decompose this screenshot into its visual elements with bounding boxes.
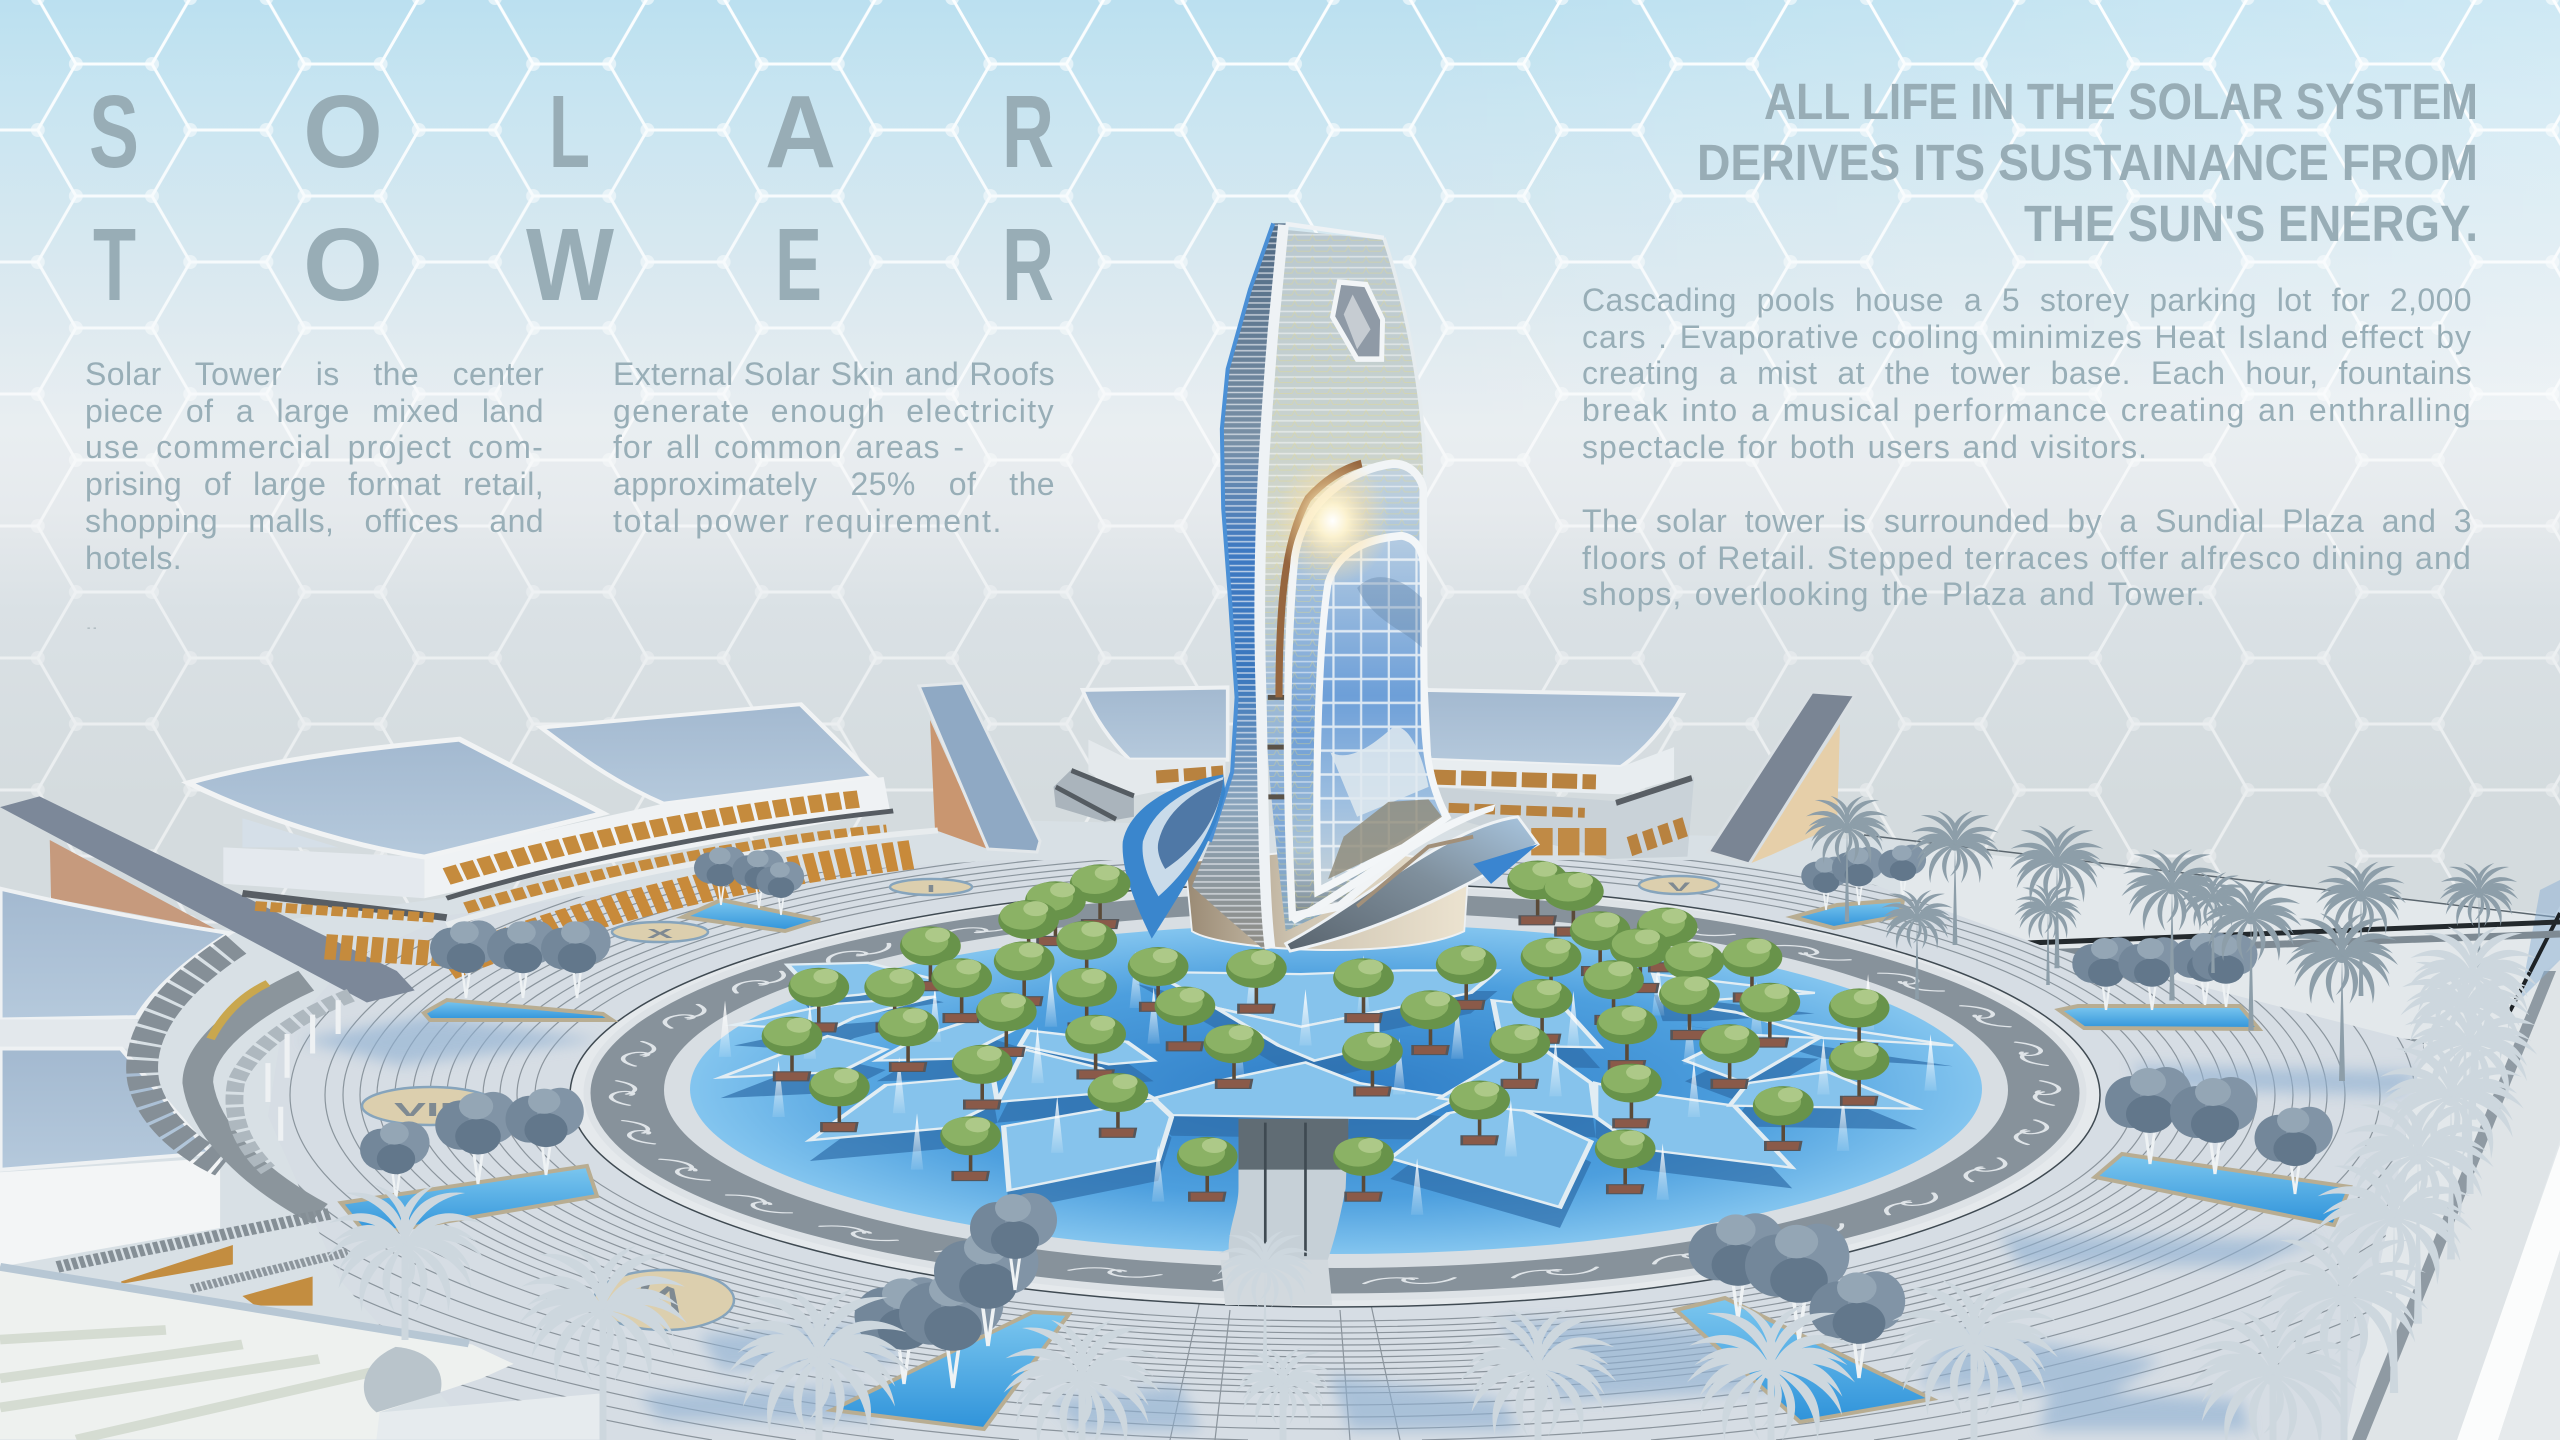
medallions: sundial hour markers: VI (632, 1271, 689, 1319)
text block: left column intro (85, 356, 544, 576)
sweeping tail bands (1286, 804, 1538, 951)
text block: solar skin column: total power requirement. (613, 503, 1003, 539)
back buildings behind the tower (1054, 687, 1694, 859)
left curved retail building (0, 704, 938, 1440)
text block: left column intro: use commercial project com- (85, 429, 544, 465)
inner arch (1317, 536, 1446, 891)
grey trees around planters (360, 845, 2333, 1388)
heading: all life in the solar system: DERIVES ITS SUSTAINANCE FROM (1697, 134, 2478, 191)
text block: sundial plaza: floors of Retail. Stepped terraces offer alfresco dining and (1582, 540, 2472, 576)
medallions: sundial hour markers: I (927, 883, 935, 894)
title: SOLAR TOWER: O (303, 207, 383, 322)
distant palms (1805, 791, 2518, 1081)
title: SOLAR TOWER: E (775, 207, 822, 322)
hexagon sky window (1333, 282, 1383, 359)
green trees on terraces (762, 861, 1889, 1201)
text block: left column intro: prising of large format retail, (85, 466, 544, 502)
text block: cascading pools: break into a musical performance creating an enthralling (1582, 392, 2472, 428)
roof fins (919, 683, 1855, 864)
hexagon honeycomb background (0, 0, 2560, 925)
tower side strip (1192, 223, 1286, 951)
title: SOLAR TOWER: S (89, 74, 139, 189)
text block: cascading pools: Cascading pools house a 5 storey parking lot for 2,000 (1582, 282, 2472, 318)
text block: sundial plaza (1582, 503, 2472, 612)
medallions: sundial hour markers (362, 876, 1719, 1330)
tower front face (1263, 230, 1446, 931)
text block: cascading pools: spectacle for both users and visitors. (1582, 429, 2148, 465)
cascading star terraces, walkway and tunnel (721, 963, 1953, 1305)
text block: solar skin column (613, 356, 1055, 539)
text block: sundial plaza: The solar tower is surrounded by a Sundial Plaza and 3 (1582, 503, 2472, 539)
tower base drum (1185, 847, 1469, 950)
text block: left column intro: shopping malls, offices and (85, 503, 544, 539)
far right road and pebble strip (1875, 880, 2560, 1440)
text block: cascading pools: creating a mist at the tower base. Each hour, fountains (1582, 355, 2472, 391)
outer arch (1279, 464, 1446, 916)
fountains (719, 952, 1937, 1215)
blue plaza planters (341, 900, 2350, 1429)
central pool rings (570, 883, 2100, 1307)
paved plaza with paving lines (289, 860, 2424, 1440)
small marks: - - (87, 623, 96, 634)
text block: solar skin column: for all common areas - (613, 429, 965, 465)
text block: cascading pools: cars . Evaporative cooling minimizes Heat Island effect by (1582, 319, 2472, 355)
text block: left column intro: Solar Tower is the center (85, 356, 544, 392)
title: SOLAR TOWER: T (93, 207, 136, 322)
heading: all life in the solar system: THE SUN'S ENERGY. (2024, 195, 2478, 252)
text block: cascading pools (1582, 282, 2472, 465)
text block: solar skin column: External Solar Skin and Roofs (613, 356, 1055, 392)
text block: solar skin column: generate enough electricity (613, 393, 1055, 429)
title: SOLAR TOWER: W (526, 207, 615, 322)
pebble ring swirls (611, 921, 2059, 1285)
left leaf shells (1123, 774, 1225, 939)
text block: solar skin column: approximately 25% of the (613, 466, 1055, 502)
medallions: sundial hour markers: VIII (394, 1099, 466, 1120)
title: SOLAR TOWER: R (1002, 74, 1054, 189)
title: SOLAR TOWER: R (1002, 207, 1054, 322)
foreground palms (327, 919, 2537, 1440)
text block: left column intro: hotels. (85, 540, 182, 576)
text block: left column intro: piece of a large mixed land (85, 393, 544, 429)
title: SOLAR TOWER: L (549, 74, 590, 189)
sun glare (1275, 456, 1391, 585)
medallions: sundial hour markers: V (1668, 881, 1690, 894)
title: SOLAR TOWER: A (765, 74, 836, 189)
medallions: sundial hour markers: X (647, 927, 674, 941)
tower (1123, 223, 1538, 951)
title: SOLAR TOWER: O (303, 74, 383, 189)
text block: sundial plaza: shops, overlooking the Plaza and Tower. (1582, 576, 2206, 612)
ground beyond the plaza (0, 820, 2560, 1440)
